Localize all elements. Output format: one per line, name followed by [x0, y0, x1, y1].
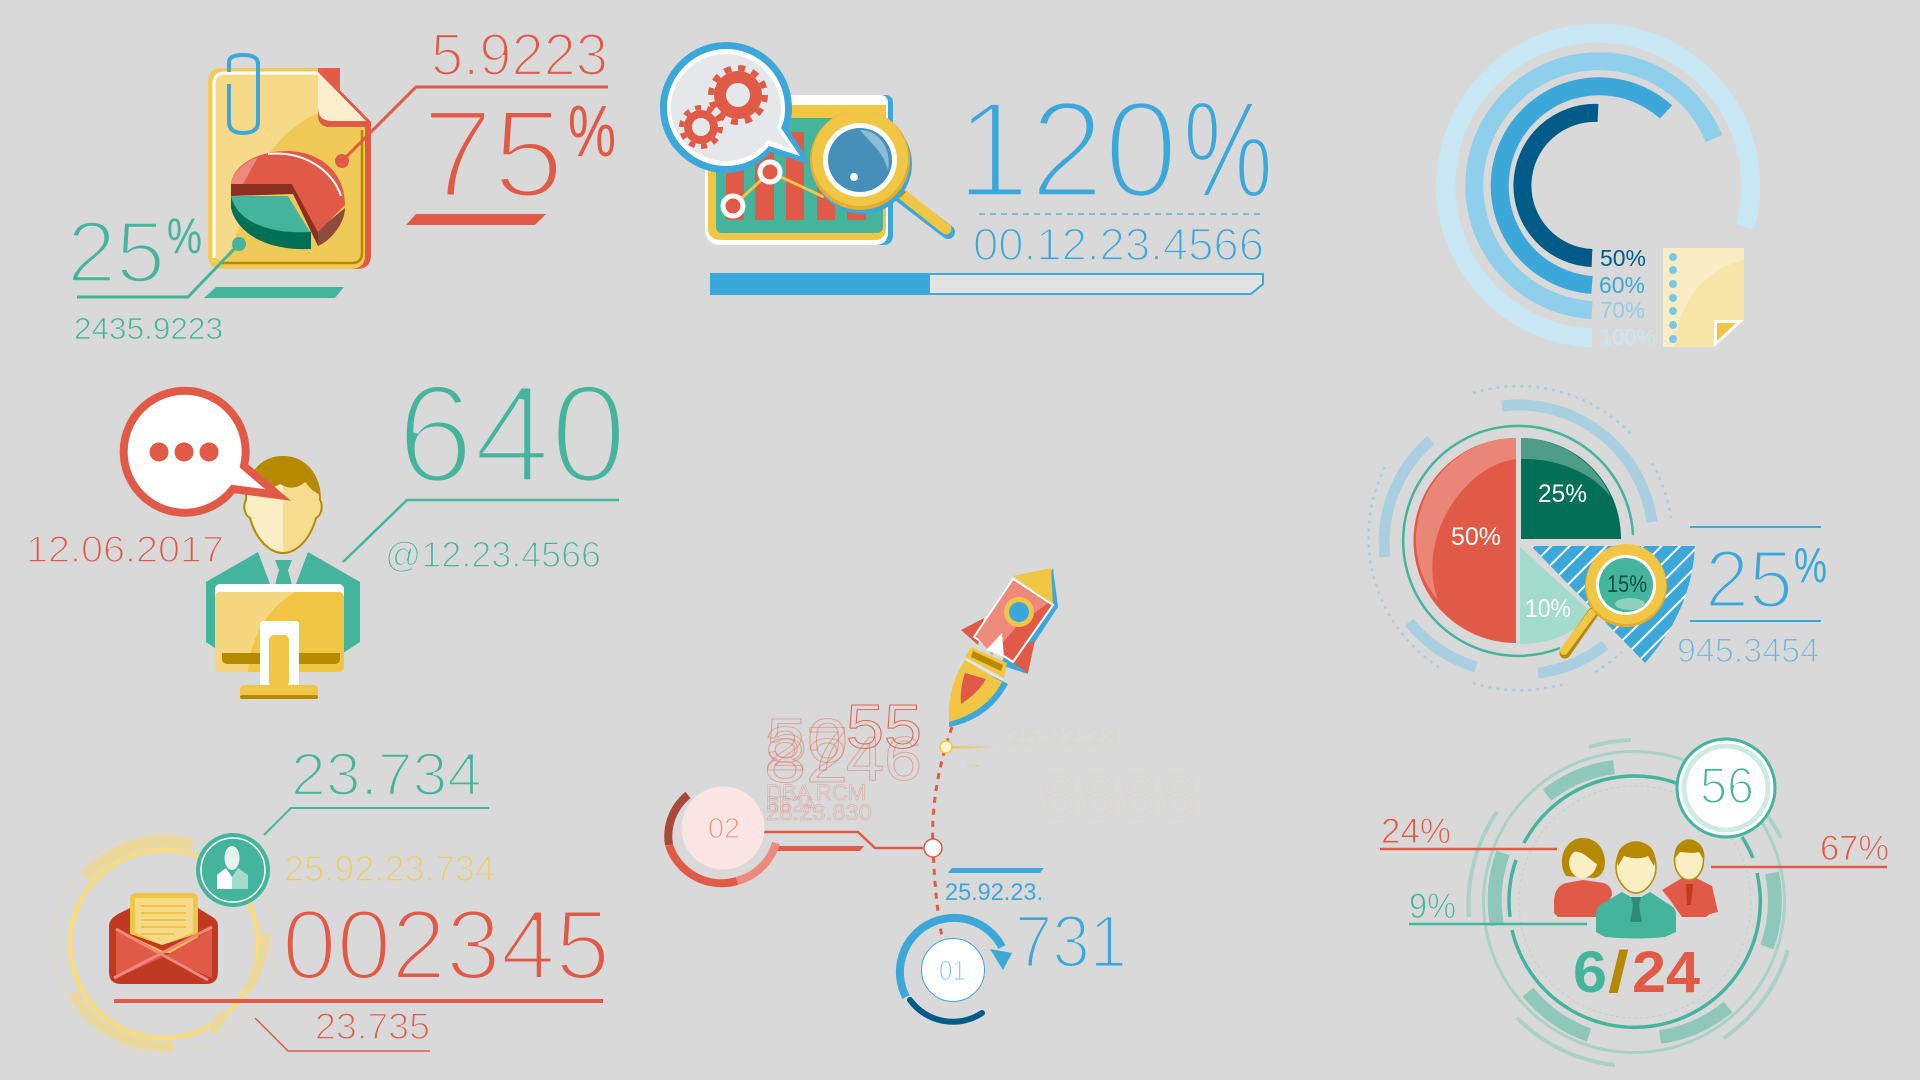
- callout line: 640: [343, 500, 619, 562]
- icon: rocket: [949, 568, 1058, 727]
- value: 75%: %: [568, 92, 616, 172]
- panel: team circle: [1380, 739, 1889, 1065]
- value: 945.3454: 945.3454: [1677, 632, 1819, 670]
- badge: 01: 01: [939, 955, 966, 986]
- ghost text: fading numbers: BB2A: [766, 792, 816, 817]
- main ring: [1509, 776, 1760, 1027]
- value: 23.735: 23.735: [315, 1006, 430, 1047]
- badge: 01: [900, 918, 1012, 1022]
- callout: 67%: 67%: [1820, 829, 1889, 868]
- panel: pie chart with magnifier: [1368, 386, 1827, 690]
- value: 5.9223: 5.9223: [431, 22, 608, 88]
- bar: blue: [948, 868, 1044, 873]
- icon: document with pie chart: [208, 55, 371, 269]
- ghost text: fading numbers: [764, 693, 922, 825]
- callout: 24%: 24%: [1381, 812, 1451, 851]
- value: 25%: %: [1794, 539, 1827, 593]
- ghost text: fading yellow numbers: 8888: [1038, 763, 1198, 832]
- person: centre man: [1596, 842, 1676, 938]
- legend: ring percentages: [1599, 245, 1656, 350]
- callout line: 23.735: [255, 1018, 430, 1051]
- icon: sticky note: [1663, 248, 1744, 347]
- value: 640: 640: [397, 355, 627, 512]
- icon: person badge: [196, 833, 270, 907]
- chart: concentric rings: [1446, 33, 1751, 338]
- ring: pie outline: [1403, 426, 1633, 656]
- value: 25%: %: [167, 208, 202, 264]
- value: 6/24: 24: [1632, 940, 1700, 1005]
- badge: 02: 02: [708, 813, 740, 845]
- value: 6/24: 6: [1573, 940, 1607, 1005]
- callout: 9%: 9%: [1409, 887, 1456, 926]
- panel: analysis chart: [660, 42, 1273, 295]
- bar: red: [406, 214, 546, 225]
- decorative outer rings: [1468, 740, 1788, 1065]
- icon: monitor: [215, 584, 344, 699]
- slice: 50%: [1414, 438, 1516, 643]
- ghost text: fading numbers: 82: [764, 727, 848, 796]
- icon: magnifier: [1564, 544, 1667, 653]
- decorative circles: [53, 833, 275, 1055]
- slice: 50%: 50%: [1451, 523, 1501, 551]
- ghost text: fading numbers: DBA RCM: [766, 780, 866, 805]
- callout line: 75%: [335, 87, 608, 168]
- panel: document pie chart: [67, 22, 616, 346]
- ghost text: fading numbers: 55: [846, 693, 922, 762]
- value: 120%: %: [1183, 73, 1273, 227]
- value: 120%: 120: [956, 73, 1178, 227]
- slice: 25%: [1521, 438, 1621, 539]
- value: 002345: 002345: [282, 889, 610, 1000]
- icon: bar chart board: [705, 95, 893, 245]
- icon: speech bubble: [124, 391, 278, 513]
- value: 23.734: 23.734: [291, 741, 482, 808]
- ghost text: fading yellow numbers: 25.92.23: [1007, 724, 1119, 751]
- value: 6/24: /: [1608, 940, 1629, 1005]
- person: right man: [1662, 840, 1718, 917]
- legend: ring percentages: 100%: [1600, 324, 1656, 350]
- icon: magnifier: 15%: [1607, 571, 1647, 598]
- icon: magnifying glass: [810, 110, 948, 232]
- thick arcs: [1495, 767, 1775, 1037]
- person: woman: [1554, 838, 1612, 917]
- ghost text: fading yellow numbers: [1007, 724, 1198, 832]
- value: 75%: 75: [422, 85, 564, 224]
- node: yellow: [940, 741, 1000, 767]
- value: @12.23.4566: @12.23.4566: [385, 534, 601, 575]
- decorative rings: [1384, 405, 1652, 673]
- icon: person: [206, 456, 360, 655]
- panel: radial progress rings: [1446, 33, 1751, 350]
- icon: team of three: [1554, 838, 1718, 938]
- badge: 02: [668, 786, 776, 883]
- callout line: 25%: [77, 237, 246, 297]
- panel: person at monitor: [26, 355, 627, 699]
- bar: green: [204, 287, 344, 298]
- dotted inner ring: [1519, 786, 1751, 1018]
- value: 25%: 25: [1705, 534, 1793, 625]
- legend: ring percentages: 50%: [1600, 245, 1646, 271]
- chart: 3D pie: [231, 151, 345, 249]
- dotted rings: [1368, 386, 1671, 690]
- rules: [1690, 527, 1821, 621]
- value: 00.12.23.4566: 00.12.23.4566: [973, 219, 1264, 270]
- value: 25.92.23.: 25.92.23.: [945, 879, 1043, 906]
- ghost text: fading numbers: 46: [846, 725, 922, 794]
- progress bar: [710, 273, 1263, 295]
- value: 731: 731: [1015, 900, 1127, 983]
- value: 25%: 25: [67, 204, 165, 301]
- badge: 56: 56: [1700, 757, 1754, 814]
- slice: 25%: 25%: [1538, 480, 1587, 508]
- value: 12.06.2017: 12.06.2017: [26, 529, 224, 570]
- chart: pie slices: [1414, 438, 1695, 663]
- slice: 10%: 10%: [1525, 595, 1571, 623]
- dashed rule: [979, 213, 1260, 215]
- callout line: 23.734: [264, 808, 489, 835]
- panel: rocket timeline: [668, 568, 1198, 1022]
- icon: gears speech bubble: [660, 42, 811, 173]
- legend: ring percentages: 70%: [1600, 297, 1645, 323]
- ghost text: fading numbers: 50: [766, 707, 848, 776]
- panel: envelope stats: [53, 741, 610, 1055]
- icon: envelope: [109, 893, 218, 984]
- icon: paper clip: [229, 55, 258, 133]
- slice: 15% hatched: [1531, 546, 1695, 663]
- badge: 56: [1677, 739, 1775, 837]
- ghost text: fading numbers: 28.23.830: [766, 800, 872, 825]
- ghost text: fading numbers: 27: [764, 715, 848, 784]
- value: 6/24: [1573, 940, 1700, 1005]
- value: 2435.9223: 2435.9223: [74, 311, 223, 346]
- value: 25.92.23.734: 25.92.23.734: [284, 848, 495, 889]
- legend: ring percentages: 60%: [1599, 272, 1645, 298]
- rule: red: [114, 999, 603, 1003]
- dotted path: [933, 727, 952, 937]
- slice: 10%: [1520, 547, 1593, 644]
- node: 02 connector: [764, 832, 942, 857]
